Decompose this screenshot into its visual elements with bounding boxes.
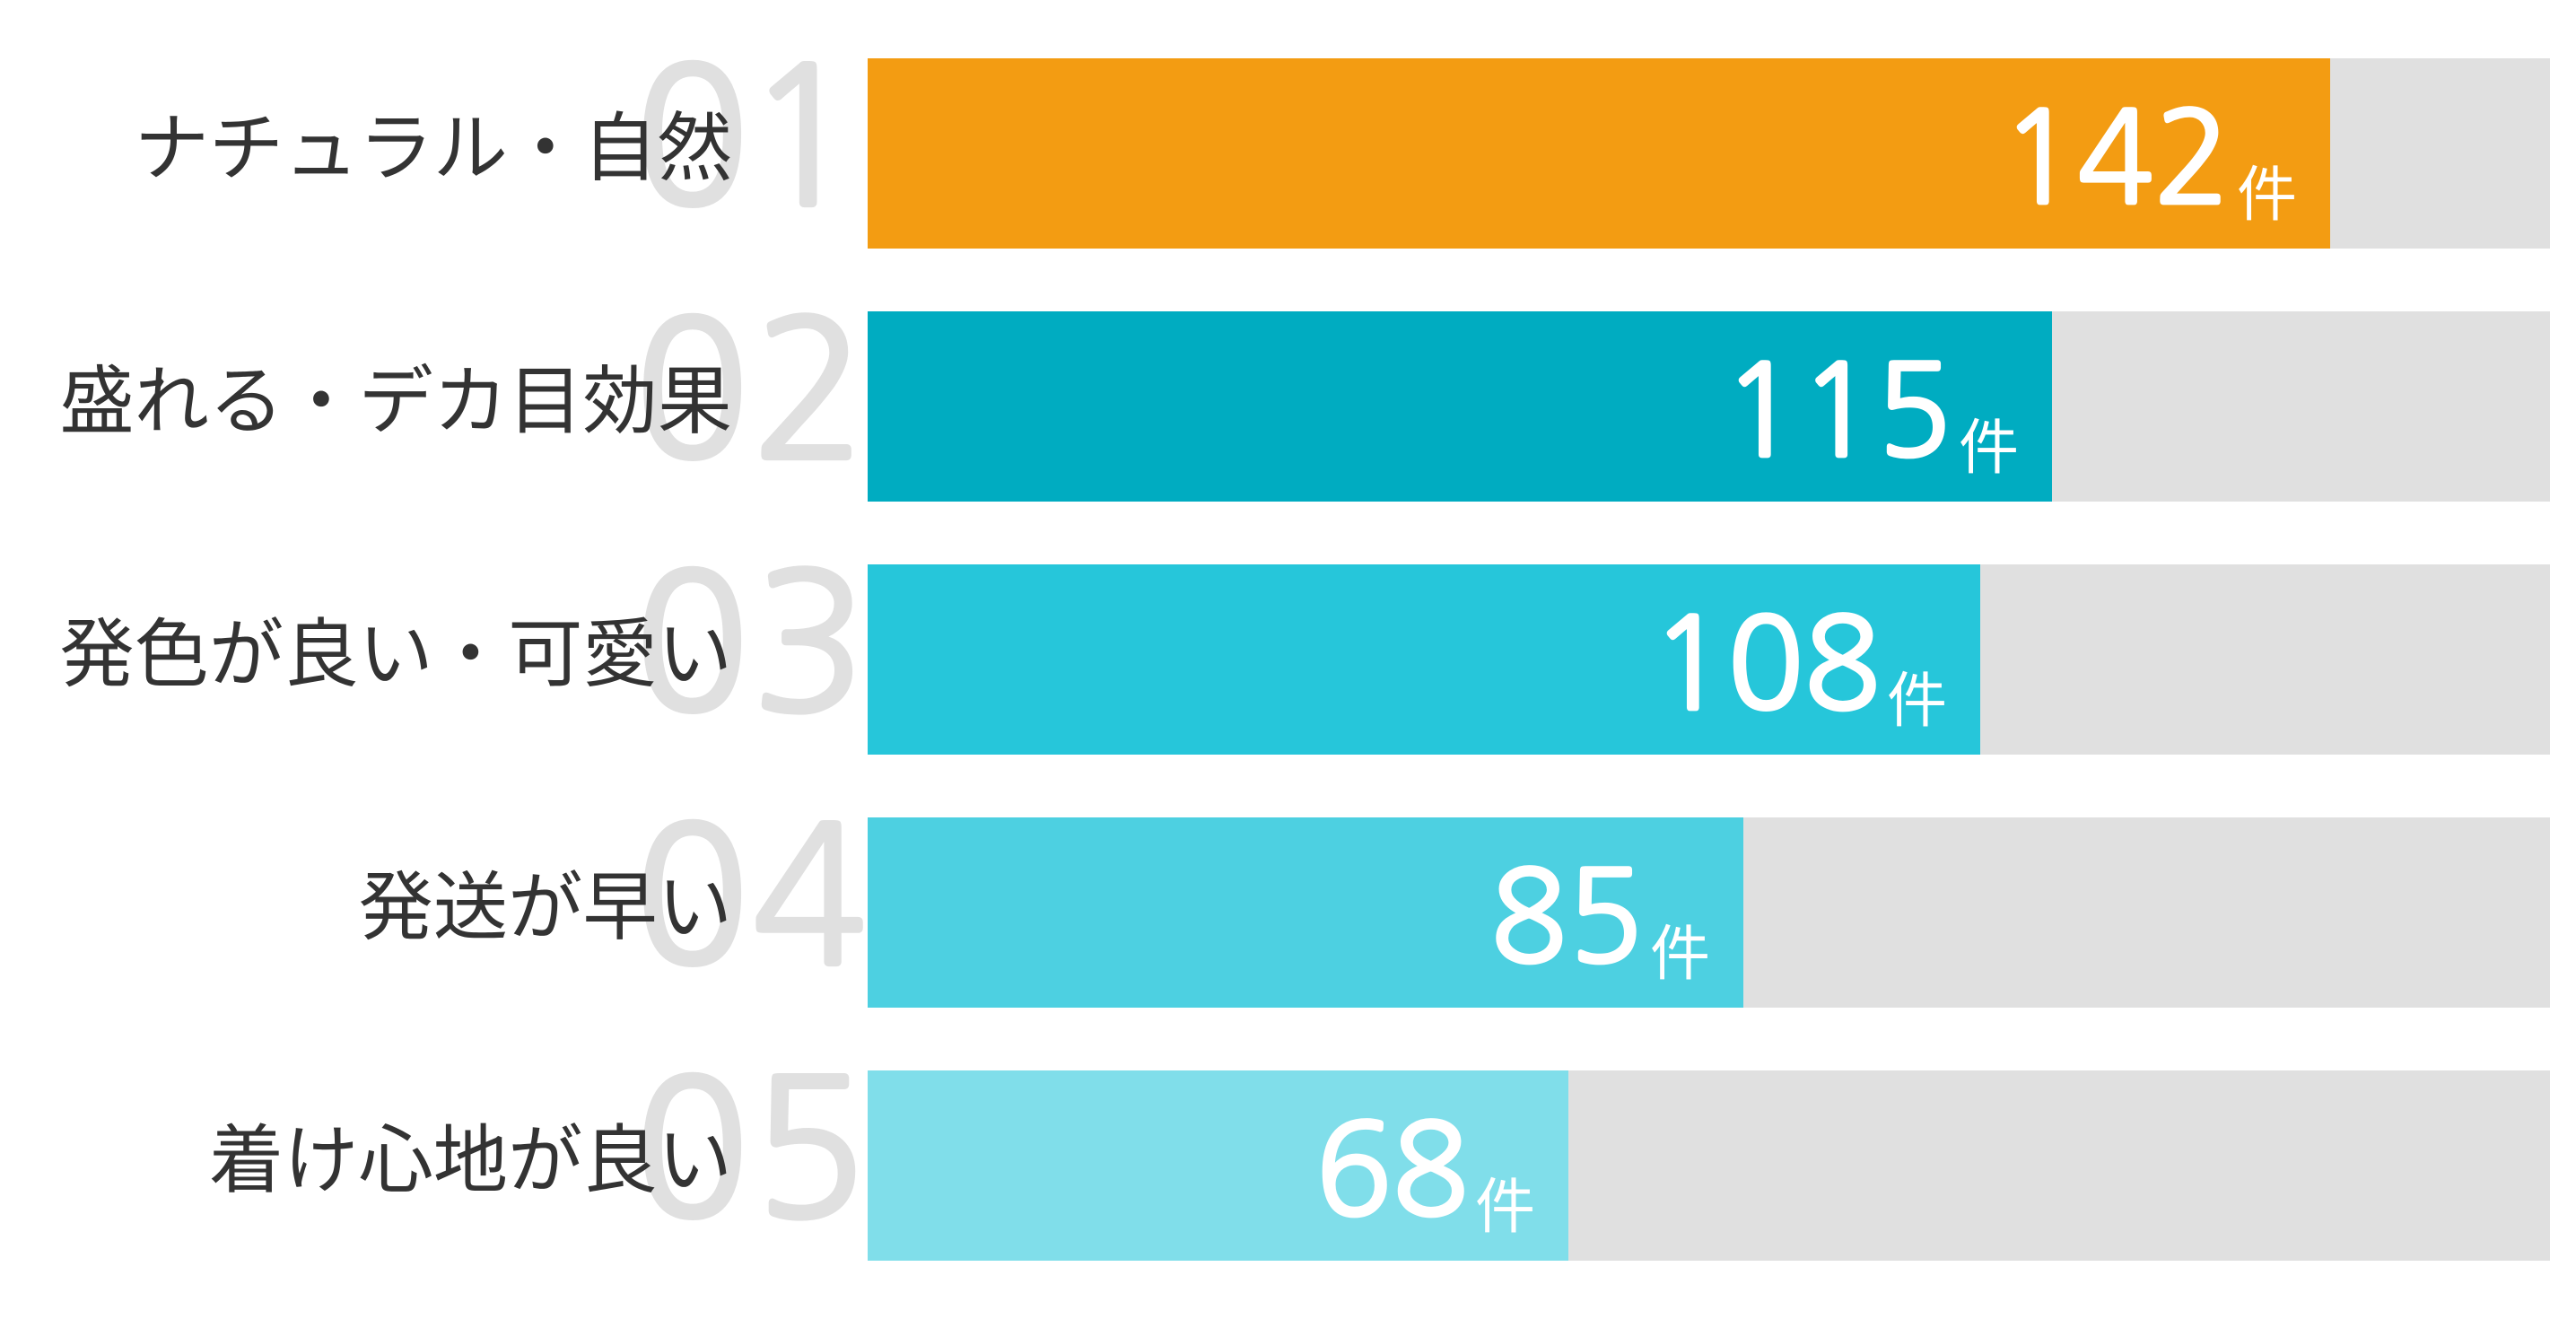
unit 2: 件 — [1959, 399, 2019, 486]
row 1: ナチュラル・自然 — [135, 42, 2550, 249]
rank number 04: 04 — [634, 801, 867, 991]
unit 4: 件 — [1650, 905, 1710, 992]
bar value 68 — [868, 1070, 1568, 1261]
bar track 2 — [868, 311, 2550, 502]
rank number 01: 01 — [634, 42, 860, 232]
unit 3: 件 — [1887, 652, 1947, 739]
bar track 3 — [868, 564, 2550, 755]
value 85: 85 — [1490, 854, 1644, 981]
label 5: 着け心地が良い — [209, 1099, 732, 1208]
bar track 4 — [868, 817, 2550, 1008]
value 68: 68 — [1315, 1107, 1469, 1234]
rank number 02: 02 — [634, 295, 867, 485]
label 2: 盛れる・デカ目効果 — [59, 340, 732, 449]
bar value 85 — [868, 817, 1743, 1008]
bar value 115 — [868, 311, 2052, 502]
rank number 05: 05 — [634, 1054, 867, 1245]
bar value 142 — [868, 58, 2330, 249]
value 115: 115 — [1723, 348, 1952, 475]
bar track 5 — [868, 1070, 2550, 1261]
label 3: 発色が良い・可愛い — [59, 593, 732, 702]
row 5: 着け心地が良い — [209, 1054, 2550, 1261]
bar track 1 — [868, 58, 2550, 249]
row 3: 発色が良い・可愛い — [59, 548, 2550, 755]
label 1: ナチュラル・自然 — [135, 87, 732, 196]
value 142: 142 — [2001, 95, 2231, 222]
row 2: 盛れる・デカ目効果 — [59, 295, 2550, 502]
value 108: 108 — [1651, 601, 1881, 728]
label 4: 発送が早い — [359, 846, 732, 955]
bar value 108 — [868, 564, 1980, 755]
unit 5: 件 — [1475, 1158, 1535, 1245]
unit 1: 件 — [2237, 146, 2297, 233]
rank number 03: 03 — [634, 548, 867, 738]
row 4: 発送が早い — [359, 801, 2550, 1008]
